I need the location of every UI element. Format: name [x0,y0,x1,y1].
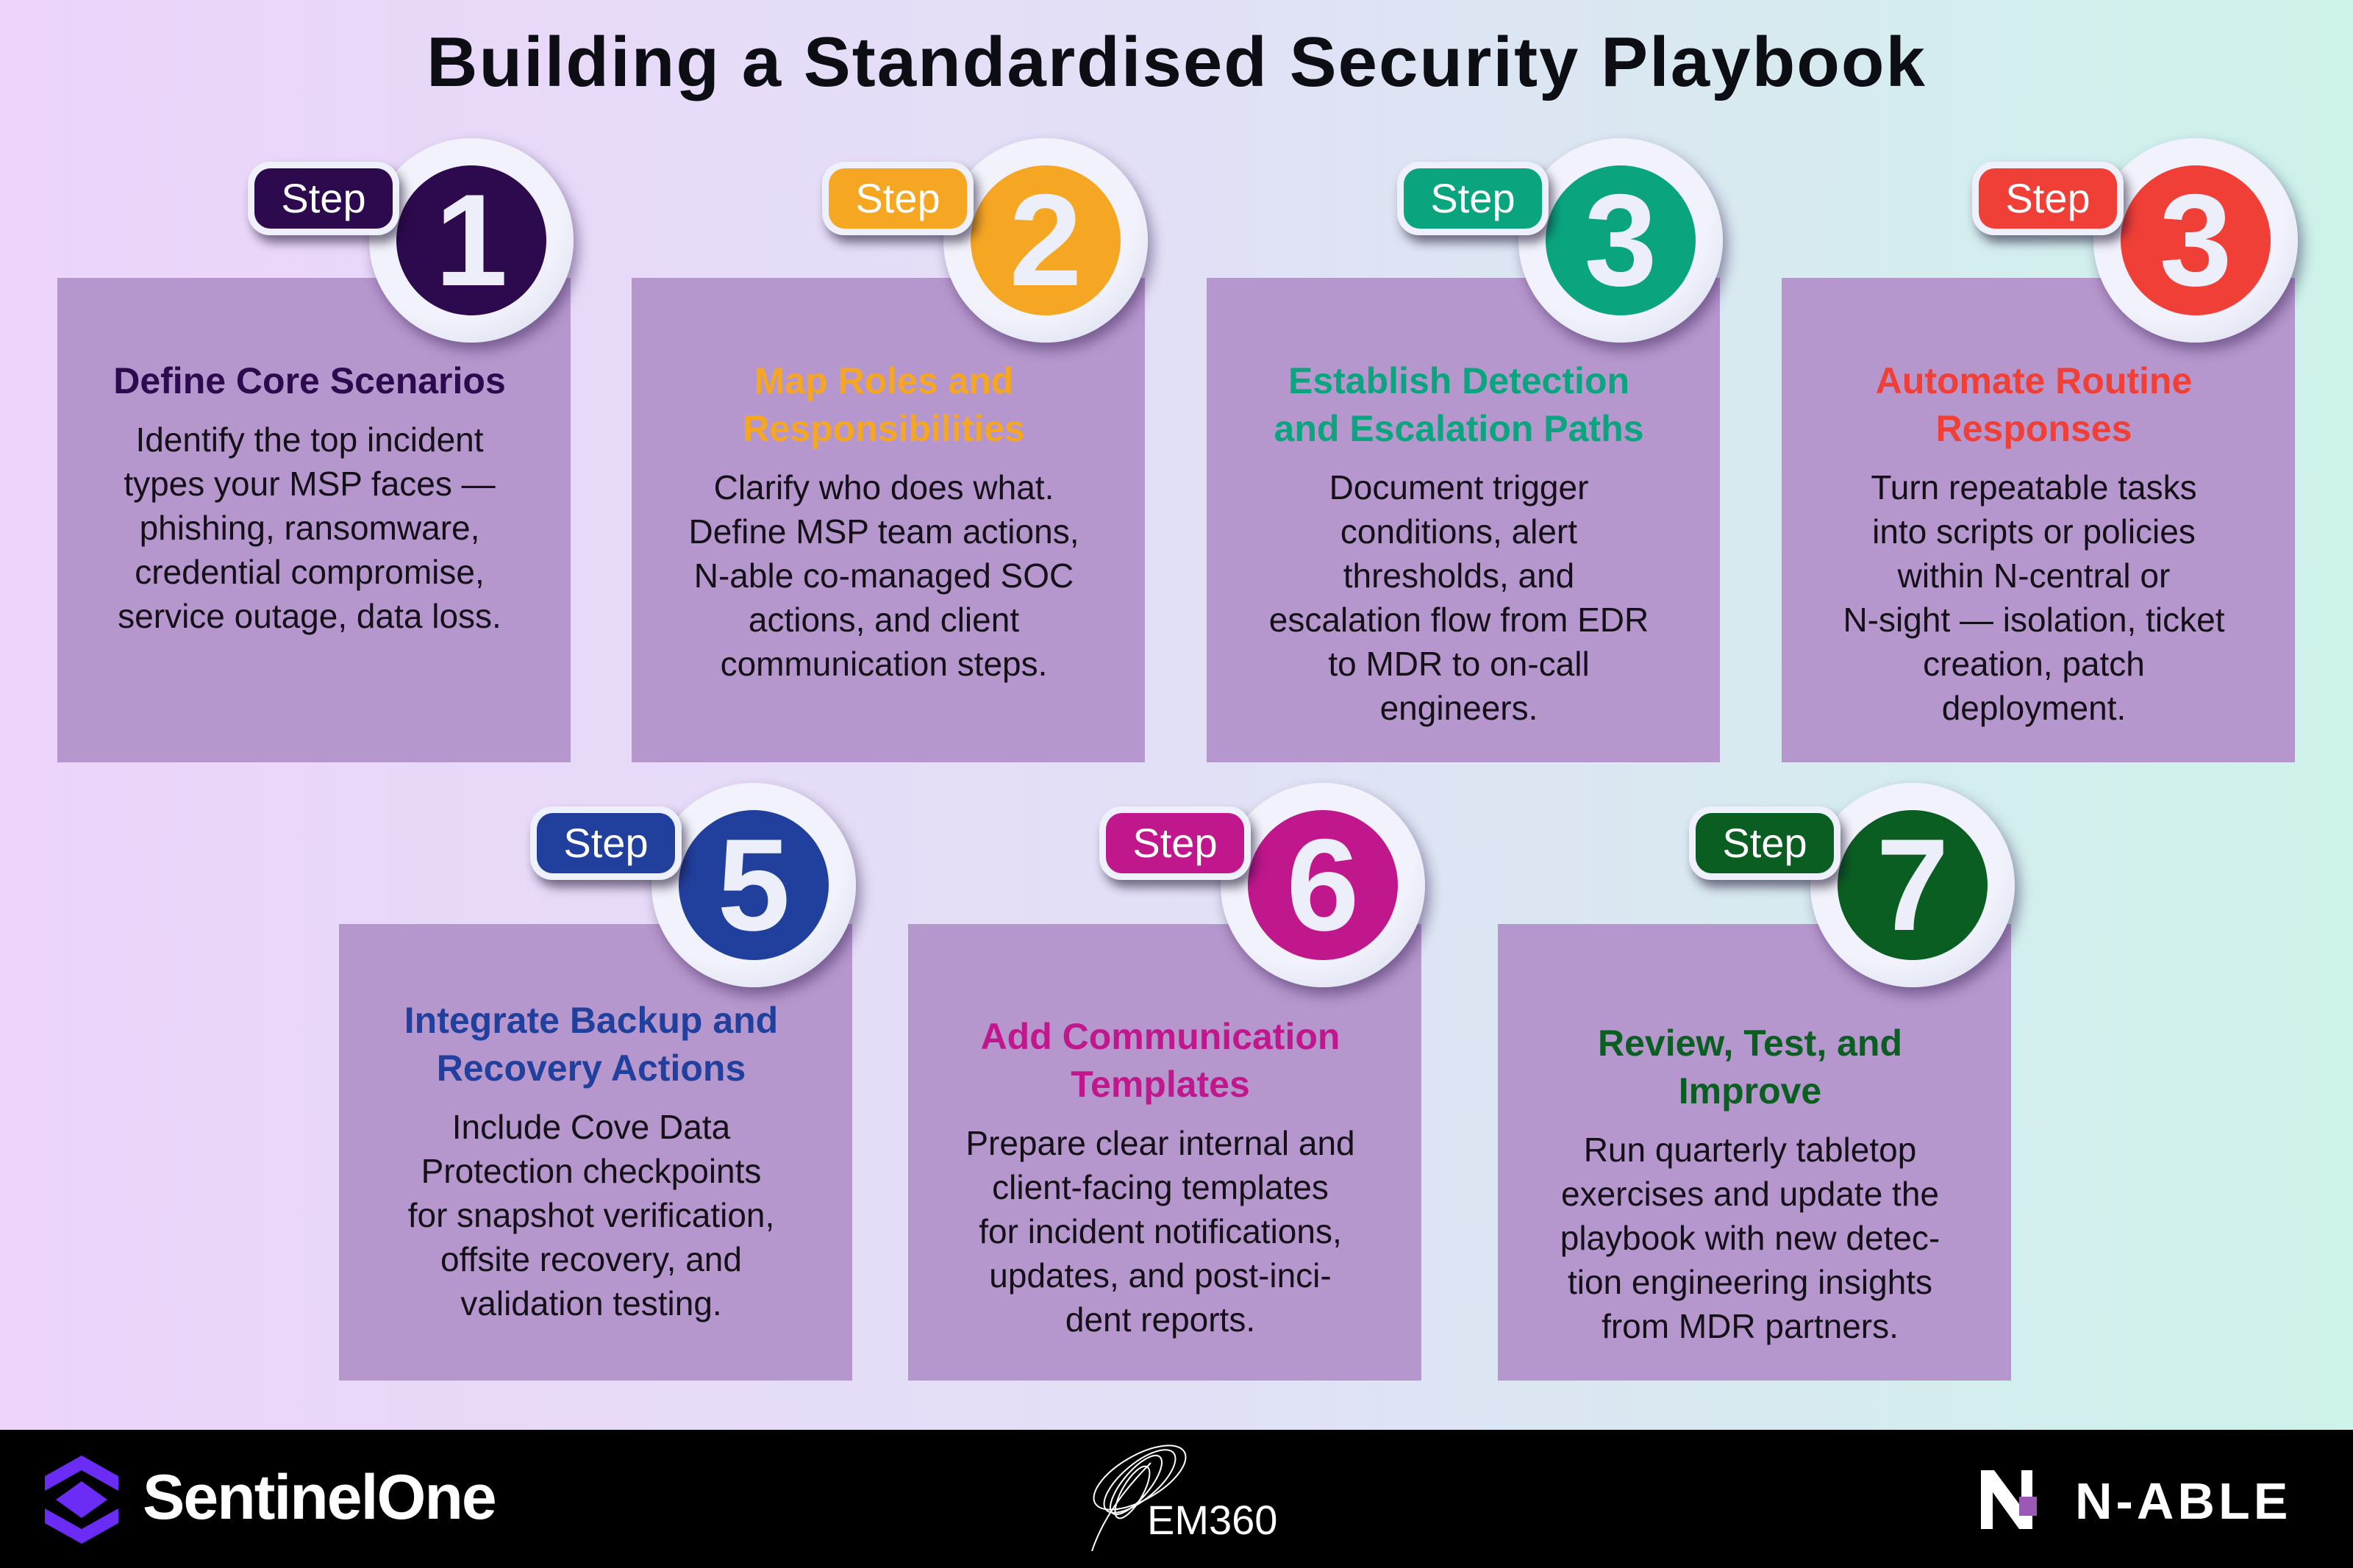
heading 3: to MDR to on-call [1328,645,1590,683]
heading 3: engineers. [1380,689,1538,727]
heading 5: Integrate Backup and [404,1000,778,1041]
heading 6: for incident notifications, [979,1212,1342,1250]
panel: step 6 [908,924,1421,1381]
badge: step 6: 6 [1287,812,1359,958]
heading 6: client-facing templates [992,1168,1329,1206]
heading 1: Define Core Scenarios [113,360,506,401]
heading 7: Review, Test, and [1598,1023,1902,1064]
heading 5: Include Cove Data [452,1108,730,1146]
text: Step [1722,820,1807,866]
heading 5: for snapshot verification, [408,1196,774,1234]
heading 4: Automate Routine [1876,360,2192,401]
heading 6: updates, and post-inci- [989,1256,1332,1295]
heading 5: Protection checkpoints [421,1152,761,1190]
text: Step [1132,820,1218,866]
heading 3: Establish Detection [1288,360,1629,401]
heading 6: dent reports. [1065,1300,1255,1339]
heading 3: Document trigger [1329,468,1588,506]
heading 1: types your MSP faces — [124,465,496,503]
heading 4: Turn repeatable tasks [1871,468,2197,506]
heading 3: thresholds, and [1343,556,1574,595]
heading 2 [689,360,1079,683]
panel: step 5 [339,924,852,1381]
heading 1: Identify the top incident [135,420,484,459]
heading 2: Define MSP team actions, [689,512,1079,551]
heading 5: validation testing. [460,1284,722,1322]
logo: N-able: N-ABLE [2075,1472,2291,1530]
heading 4: into scripts or policies [1872,512,2196,551]
heading 3: escalation flow from EDR [1269,601,1649,639]
heading 1: service outage, data loss. [118,597,501,635]
heading 7: Run quarterly tabletop [1584,1131,1916,1169]
panel: step 1 [57,278,571,762]
badge: step 4 [1969,137,2311,357]
title: Building a Standardised Security Playbook [426,23,1927,101]
heading 2: N-able co-managed SOC [694,556,1074,595]
badge: step 7: 7 [1877,812,1949,958]
logo: SentinelOne: SentinelOne [143,1462,496,1533]
text: Step [563,820,649,866]
heading 2: Map Roles and [754,360,1013,401]
heading 3: conditions, alert [1340,512,1577,551]
badge: step 5 [526,781,869,1002]
badge: step 7 [1685,781,2028,1002]
panel: step 3 [1207,278,1720,762]
badge: step 6 [1096,781,1438,1002]
logo: EM360: EM360 [1147,1497,1277,1543]
heading 5 [404,1000,778,1322]
badge: step 2: 2 [1009,167,1082,313]
panel: step 4 [1782,278,2295,762]
badge: step 3: 3 [1584,167,1657,313]
heading 1: credential compromise, [135,553,485,591]
badge: step 1 [244,137,587,357]
text: Step [1430,175,1515,221]
panel: step 2 [632,278,1145,762]
footer [0,1430,2353,1568]
heading 4: deployment. [1942,689,2126,727]
heading 6 [965,1016,1355,1339]
heading 2: actions, and client [749,601,1019,639]
heading 5: Recovery Actions [437,1048,746,1089]
text: Step [2005,175,2090,221]
heading 1 [113,360,506,635]
heading 6: Prepare clear internal and [965,1124,1355,1162]
logo: N-able [1981,1470,2291,1530]
panel: step 7 [1498,924,2011,1381]
heading 4: creation, patch [1923,645,2145,683]
text: Step [281,175,366,221]
heading 7 [1560,1023,1940,1345]
text: Step [855,175,940,221]
heading 1: phishing, ransomware, [140,509,479,547]
heading 4 [1843,360,2225,727]
heading 2: communication steps. [721,645,1047,683]
heading 7: tion engineering insights [1568,1263,1932,1301]
badge: step 2 [819,137,1161,357]
heading 2: Clarify who does what. [714,468,1054,506]
heading 7: from MDR partners. [1602,1307,1899,1345]
heading 6: Templates [1071,1064,1250,1105]
heading 2: Responsibilities [743,408,1025,449]
heading 5: offsite recovery, and [440,1240,742,1278]
badge: step 3 [1394,137,1736,357]
heading 7: playbook with new detec- [1560,1219,1940,1257]
heading 6: Add Communication [981,1016,1340,1057]
heading 7: exercises and update the [1561,1175,1939,1213]
badge: step 5: 5 [718,812,790,958]
heading 4: within N-central or [1898,556,2170,595]
heading 4: Responses [1936,408,2132,449]
badge: step 1: 1 [435,167,507,313]
badge: step 4: 3 [2159,167,2232,313]
heading 4: N-sight — isolation, ticket [1843,601,2224,639]
logo: EM360 [1091,1445,1277,1551]
logo: SentinelOne [45,1456,496,1544]
heading 3 [1269,360,1649,727]
heading 7: Improve [1679,1070,1821,1111]
heading 3: and Escalation Paths [1274,408,1643,449]
